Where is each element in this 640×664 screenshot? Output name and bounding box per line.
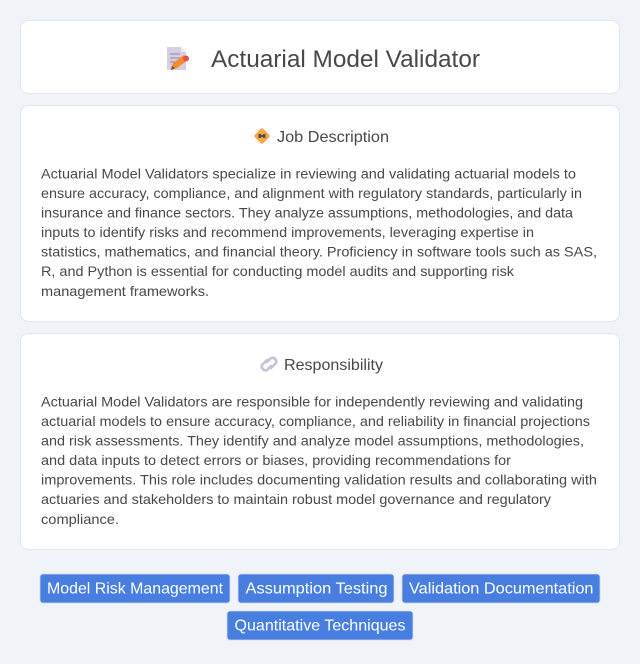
heading: job description: Job Description [277, 129, 389, 146]
text block: responsibility: actuaries and stakeholders to maintain robust model governance and regulatory [41, 491, 551, 507]
tag: model risk management [40, 574, 230, 603]
icon: link [262, 358, 276, 370]
tag: model risk management: Model Risk Management [47, 580, 224, 598]
tag: validation documentation [402, 574, 600, 603]
text block: responsibility: and data inputs to detect errors or biases, providing recommendations for [41, 452, 511, 468]
title: Actuarial Model Validator [211, 46, 480, 73]
icon: memo with pencil [167, 47, 189, 70]
text block: responsibility [41, 394, 597, 527]
text block: job description: management frameworks. [41, 283, 209, 299]
tag: assumption testing: Assumption Testing [246, 580, 388, 598]
tag: validation documentation: Validation Documentation [409, 580, 594, 598]
heading: responsibility: Responsibility [284, 357, 383, 374]
panel: title header [20, 20, 620, 94]
text block: responsibility: Actuarial Model Validators are responsible for independently reviewing and validating [41, 394, 583, 410]
text block: job description: Actuarial Model Validators specialize in reviewing and validating actuarial models to [41, 166, 576, 182]
text block: job description: R, and Python is essential for conducting model audits and supporting risk [41, 263, 515, 279]
text block: job description: inputs to identify risks and recommend improvements, leveraging expertise in [41, 224, 534, 240]
panel: responsibility [20, 334, 620, 550]
text block: job description: statistics, mathematics, and financial theory. Proficiency in software tools such as SAS, [41, 244, 597, 260]
text block: responsibility: and risk assessments. They identify and analyze model assumptions, methodologies, [41, 432, 584, 448]
text block: job description: insurance and finance sectors. They analyze assumptions, methodologies, and data [41, 204, 573, 220]
tag: quantitative techniques [227, 611, 413, 640]
text block: job description: ensure accuracy, compliance, and alignment with regulatory standards, particularly in [41, 185, 582, 201]
tag: quantitative techniques: Quantitative Techniques [234, 618, 406, 634]
text block: job description [41, 166, 597, 299]
panel: job description [20, 106, 620, 322]
text block: responsibility: compliance. [41, 511, 119, 527]
text block: responsibility: improvements. This role includes documenting validation results and collaborating with [41, 472, 597, 488]
text block: responsibility: actuarial models to ensure accuracy, compliance, and reliability in financial projections [41, 413, 590, 429]
icon: orange diamond [254, 128, 270, 144]
tag: assumption testing [238, 574, 394, 603]
